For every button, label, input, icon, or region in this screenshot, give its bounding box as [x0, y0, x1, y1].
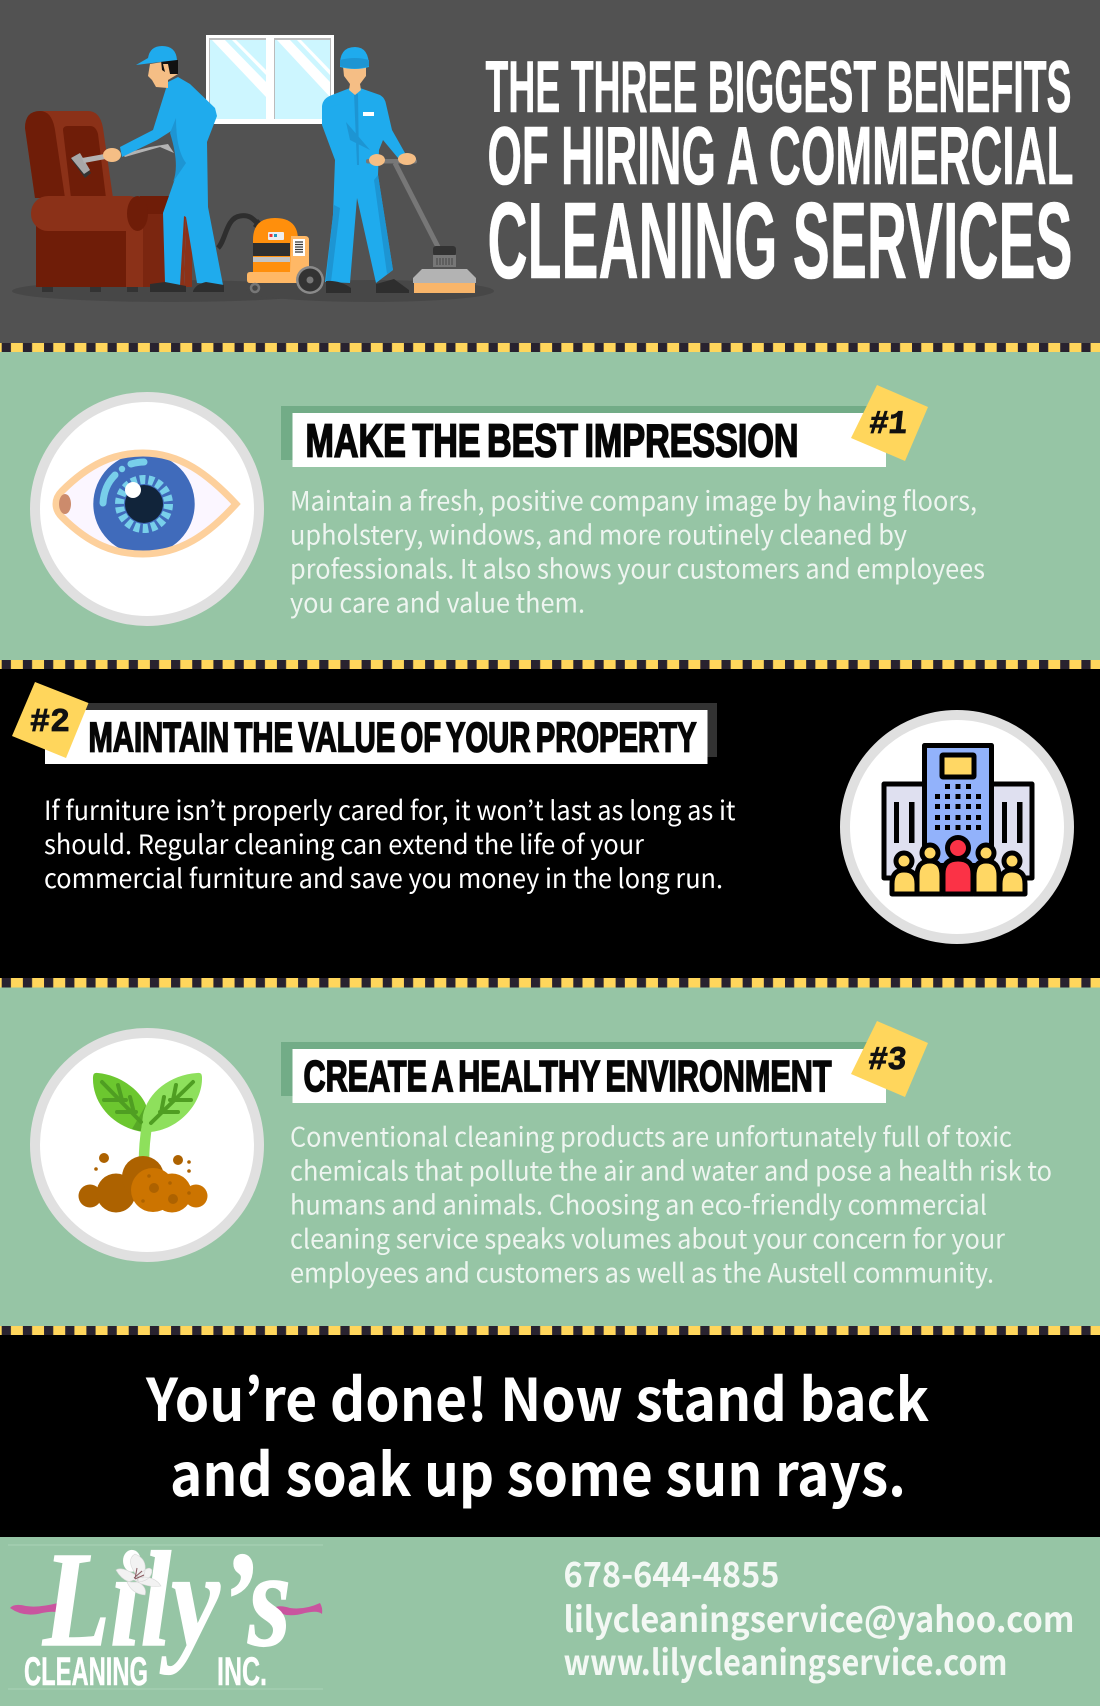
logo: Lily's Cleaning Inc.: INC.	[217, 1650, 267, 1694]
icon: sprouting plant	[35, 1033, 259, 1257]
heading bar: create a healthy environment	[281, 1042, 886, 1103]
body text	[290, 1116, 1052, 1290]
section 2 background	[0, 668, 1100, 979]
badge #2	[12, 682, 88, 758]
body text: you care and value them.	[290, 582, 585, 620]
body text: humans and animals. Choosing an eco-friendly commercial	[290, 1184, 987, 1222]
badge #3: #3	[867, 1041, 909, 1079]
title	[486, 47, 1074, 302]
icon: eye	[35, 397, 259, 621]
body text: Conventional cleaning products are unfortunately full of toxic	[290, 1116, 1012, 1154]
contact details: www.lilycleaningservice.com	[564, 1635, 1008, 1686]
heading bar: maintain the value	[45, 703, 717, 764]
body text: chemicals that pollute the air and water and pose a health risk to	[290, 1150, 1052, 1188]
section 3 background	[0, 987, 1100, 1326]
closing message: and soak up some sun rays.	[170, 1428, 906, 1513]
footer background	[0, 1537, 1100, 1706]
body text: employees and customers as well as the Austell community.	[290, 1252, 994, 1290]
vacuum cleaner	[218, 216, 324, 294]
icon: office buildings and people	[845, 715, 1069, 939]
pink flourishes	[10, 1603, 322, 1615]
body text: should. Regular cleaning can extend the life of your	[44, 823, 645, 862]
armchair	[25, 111, 192, 292]
contact details: 678-644-4855	[564, 1547, 780, 1598]
heading bar: maintain the value: MAINTAIN THE VALUE OF YOUR PROPERTY	[88, 714, 696, 760]
badge #2: #2	[30, 704, 70, 741]
heading bar: create a healthy environment: CREATE A HEALTHY ENVIRONMENT	[304, 1052, 832, 1101]
contact details: lilycleaningservice@yahoo.com	[564, 1592, 1074, 1643]
logo: Lily's Cleaning Inc.: CLEANING	[24, 1650, 148, 1694]
cleaner with floor polisher	[322, 47, 476, 293]
closing message	[145, 1353, 929, 1513]
logo: Lily's Cleaning Inc.: Lily’s	[42, 1525, 291, 1675]
section 1 background	[0, 352, 1100, 660]
window	[206, 35, 334, 124]
panel: benefit 3	[35, 1021, 1052, 1290]
body text	[44, 789, 736, 896]
closing message: You’re done! Now stand back	[145, 1353, 929, 1438]
header illustration: cleaners at work	[12, 35, 494, 302]
body text: commercial furniture and save you money in the long run.	[44, 857, 723, 896]
body text: upholstery, windows, and more routinely cleaned by	[290, 514, 907, 552]
body text	[290, 480, 985, 620]
body text: Maintain a fresh, positive company image by having floors,	[290, 480, 977, 518]
cleaner with upholstery tool	[71, 46, 224, 292]
panel: benefit 1	[35, 385, 985, 621]
header panel background	[0, 0, 1100, 343]
contact details	[564, 1547, 1074, 1686]
body text: professionals. It also shows your customers and employees	[290, 548, 985, 586]
badge #3	[851, 1021, 928, 1097]
heading bar: make the best impression: MAKE THE BEST IMPRESSION	[306, 414, 798, 466]
badge #1	[851, 385, 928, 461]
closing banner background	[0, 1335, 1100, 1537]
body text: cleaning service speaks volumes about your concern for your	[290, 1218, 1006, 1256]
lily flower	[116, 1554, 161, 1595]
floor shadow	[12, 280, 494, 302]
panel: benefit 2	[12, 682, 1069, 939]
badge #1: #1	[867, 405, 909, 443]
body text: If furniture isn’t properly cared for, it won’t last as long as it	[44, 789, 736, 828]
